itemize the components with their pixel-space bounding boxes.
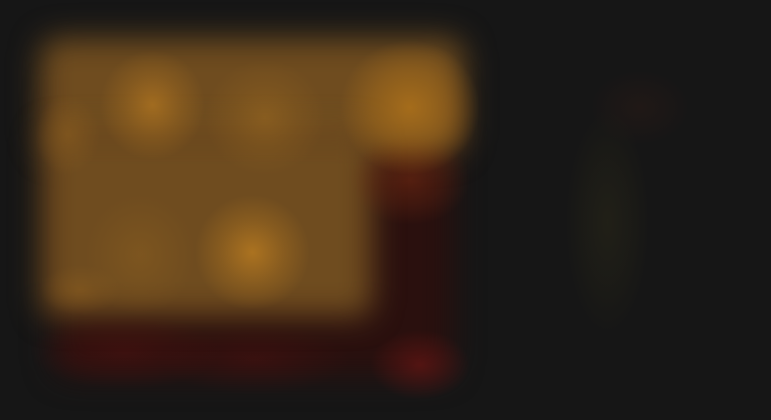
highlight: amber spot bottom left — [40, 265, 120, 315]
figure: faint olive body — [565, 110, 650, 335]
highlight: red band bottom left — [30, 315, 220, 390]
panel: dark red base — [54, 80, 452, 376]
highlight: amber spot upper right — [340, 40, 480, 175]
panel: amber lower block — [42, 130, 372, 316]
highlight: red band bottom centre — [160, 325, 350, 395]
highlight: red glow top right of base — [350, 135, 470, 225]
highlight: amber spot upper middle — [205, 60, 325, 175]
highlight: amber spot lower centre — [195, 195, 310, 310]
panel: amber upper block — [40, 38, 464, 154]
highlight: red glow bottom right — [370, 330, 470, 400]
highlight: amber spot left edge — [35, 95, 100, 175]
highlight: amber spot upper left — [100, 50, 205, 160]
highlight: amber spot lower left — [85, 195, 195, 315]
figure: faint red head — [590, 70, 690, 145]
